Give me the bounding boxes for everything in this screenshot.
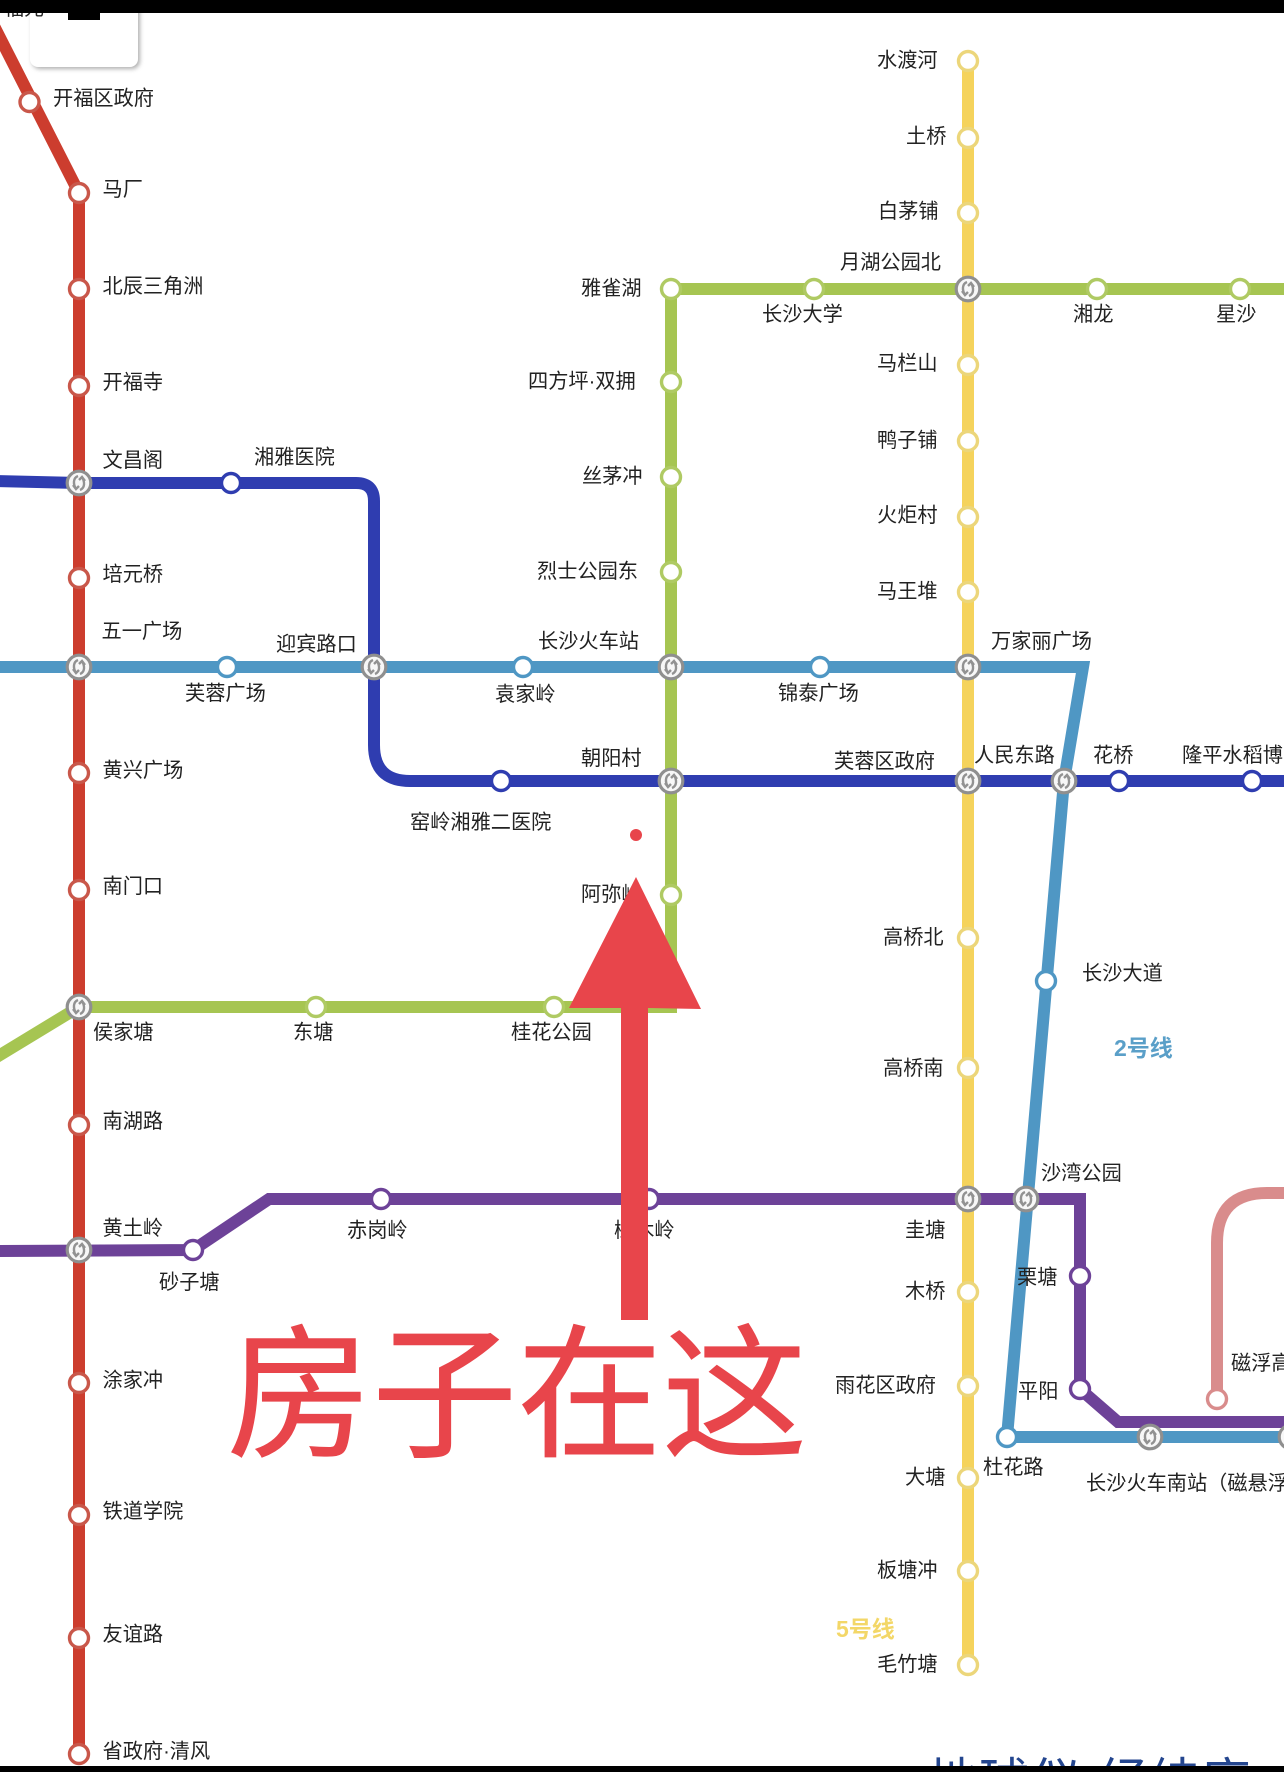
station labels: lines 2 and 4 bbox=[185, 446, 1284, 1495]
station labels: lines 2 and 4: 长沙大道 bbox=[1082, 962, 1163, 985]
station labels: line 1: 文昌阁 bbox=[102, 449, 163, 472]
station labels: line 1: 北辰三角洲 bbox=[102, 275, 203, 298]
station labels: line 5: 鸭子铺 bbox=[877, 429, 938, 452]
top black bar bbox=[0, 0, 1284, 13]
station labels: line 1: 铁道学院 bbox=[102, 1500, 183, 1523]
station labels: lines 2 and 4: 长沙火车南站（磁悬浮 bbox=[1086, 1472, 1284, 1495]
line 1 (red) with stations bbox=[0, 26, 88, 1764]
station labels: lines 2 and 4: 湘雅医院 bbox=[254, 446, 335, 469]
annotation text: 房子在这 bbox=[227, 1315, 807, 1477]
station labels: line 1: 培元桥 bbox=[102, 563, 163, 586]
station labels: line 1: 开福寺 bbox=[102, 371, 163, 394]
station labels: lines 2 and 4: 杜花路 bbox=[983, 1456, 1044, 1479]
stations: line 3 bbox=[306, 280, 1250, 1016]
station labels: line 1: 南湖路 bbox=[102, 1110, 163, 1133]
station labels: line 5: 板塘冲 bbox=[877, 1559, 938, 1582]
station labels: line 1: 侯家塘 bbox=[93, 1021, 154, 1044]
station labels: lines 2 and 4: 袁家岭 bbox=[495, 683, 556, 706]
station labels: line 5: 高桥南 bbox=[883, 1057, 944, 1080]
station labels: lines 2 and 4: 人民东路 bbox=[974, 744, 1055, 767]
line name: line 5: 5号线 bbox=[836, 1616, 895, 1642]
red arrow pointing at house location bbox=[569, 877, 701, 1320]
station labels: line 5: 大塘 bbox=[905, 1466, 945, 1489]
station labels: line 5: 白茅铺 bbox=[878, 200, 939, 223]
line 3 (green) bbox=[0, 289, 1284, 1058]
station labels: lines 2 and 4: 长沙火车站 bbox=[538, 630, 639, 653]
station labels: line 3: 湘龙 bbox=[1073, 303, 1113, 326]
white map card at top left bbox=[30, 2, 140, 69]
station labels: line 6 and maglev: 树木岭 bbox=[614, 1219, 675, 1242]
station labels: line 5: 马栏山 bbox=[877, 352, 938, 375]
station labels: line 3: 桂花公园 bbox=[511, 1021, 592, 1044]
station labels: line 1: 开福区政府 bbox=[53, 87, 154, 110]
station labels: line 1: 涂家冲 bbox=[102, 1369, 163, 1392]
station labels: line 1: 马厂 bbox=[102, 179, 143, 201]
station labels: line 5 bbox=[835, 49, 946, 1676]
station labels: line 5: 马王堆 bbox=[877, 580, 938, 603]
station labels: lines 2 and 4: 锦泰广场 bbox=[778, 682, 859, 705]
station: maglev terminus bbox=[1208, 1390, 1226, 1408]
red location dot bbox=[630, 829, 642, 841]
station labels: lines 2 and 4: 芙蓉区政府 bbox=[834, 750, 935, 773]
station labels: line 3: 丝茅冲 bbox=[582, 465, 643, 488]
station labels: line 6 and maglev: 赤岗岭 bbox=[347, 1219, 408, 1242]
station labels: line 1: 黄土岭 bbox=[102, 1217, 163, 1240]
station labels: line 1: 友谊路 bbox=[102, 1623, 163, 1646]
station labels: line 5: 圭塘 bbox=[905, 1219, 945, 1242]
station labels: line 6 and maglev bbox=[159, 1162, 1284, 1403]
station labels: line 3: 东塘 bbox=[293, 1021, 333, 1044]
station labels: lines 2 and 4: 朝阳村 bbox=[581, 747, 642, 770]
station labels: line 5: 高桥北 bbox=[883, 926, 944, 949]
station labels: lines 2 and 4: 万家丽广场 bbox=[991, 630, 1092, 653]
station labels: line 6 and maglev: 砂子塘 bbox=[159, 1271, 220, 1294]
station labels: lines 2 and 4: 花桥 bbox=[1093, 744, 1133, 767]
stations: line 6 bbox=[184, 1190, 1090, 1398]
station labels: line 6 and maglev: 沙湾公园 bbox=[1041, 1162, 1122, 1185]
maglev line (pink) bbox=[1217, 1193, 1284, 1399]
station labels: line 3: 烈士公园东 bbox=[537, 560, 638, 583]
station labels: lines 2 and 4: 窑岭湘雅二医院 bbox=[410, 811, 551, 834]
station labels: line 3 bbox=[293, 251, 1256, 1044]
bottom black bar bbox=[0, 1766, 1284, 1772]
station labels: line 3: 四方坪·双拥 bbox=[528, 370, 636, 393]
station labels: lines 2 and 4: 迎宾路口 bbox=[276, 633, 357, 656]
station labels: line 5: 火炬村 bbox=[877, 504, 938, 527]
station labels: line 5: 毛竹塘 bbox=[877, 1653, 938, 1676]
line 4 (dark blue) bbox=[0, 481, 1284, 781]
transfer stations bbox=[66, 276, 1284, 1450]
station labels: line 3: 星沙 bbox=[1216, 304, 1256, 326]
station labels: line 5: 水渡河 bbox=[877, 49, 938, 72]
station labels: line 1: 黄兴广场 bbox=[102, 759, 183, 782]
station labels: line 3: 月湖公园北 bbox=[840, 251, 941, 274]
station labels: line 3: 长沙大学 bbox=[762, 303, 843, 326]
station labels: line 3: 阿弥岭 bbox=[581, 883, 642, 906]
station labels: line 5: 土桥 bbox=[906, 125, 946, 148]
station labels: line 1: 省政府·清风 bbox=[102, 1740, 210, 1763]
line 5 (yellow) bbox=[962, 61, 974, 1665]
line name: line 2: 2号线 bbox=[1114, 1035, 1173, 1061]
station labels: line 6 and maglev: 栗塘 bbox=[1017, 1266, 1057, 1289]
stations: line 5 bbox=[958, 52, 978, 1674]
station labels: line 1 bbox=[53, 87, 210, 1763]
stations: line 2 bbox=[218, 658, 1056, 1446]
line 6 (purple) bbox=[0, 1199, 1284, 1422]
station labels: line 1: 五一广场 bbox=[102, 620, 182, 643]
station labels: line 3: 雅雀湖 bbox=[581, 277, 642, 300]
station labels: line 5: 木桥 bbox=[905, 1280, 945, 1303]
station labels: line 1: 南门口 bbox=[102, 875, 163, 898]
line 2 (light blue) bbox=[0, 667, 1284, 1437]
stations: line 4 bbox=[222, 474, 1262, 790]
station labels: line 6 and maglev: 平阳 bbox=[1018, 1380, 1058, 1403]
station labels: lines 2 and 4: 芙蓉广场 bbox=[185, 682, 266, 705]
station labels: line 5: 雨花区政府 bbox=[835, 1374, 936, 1397]
